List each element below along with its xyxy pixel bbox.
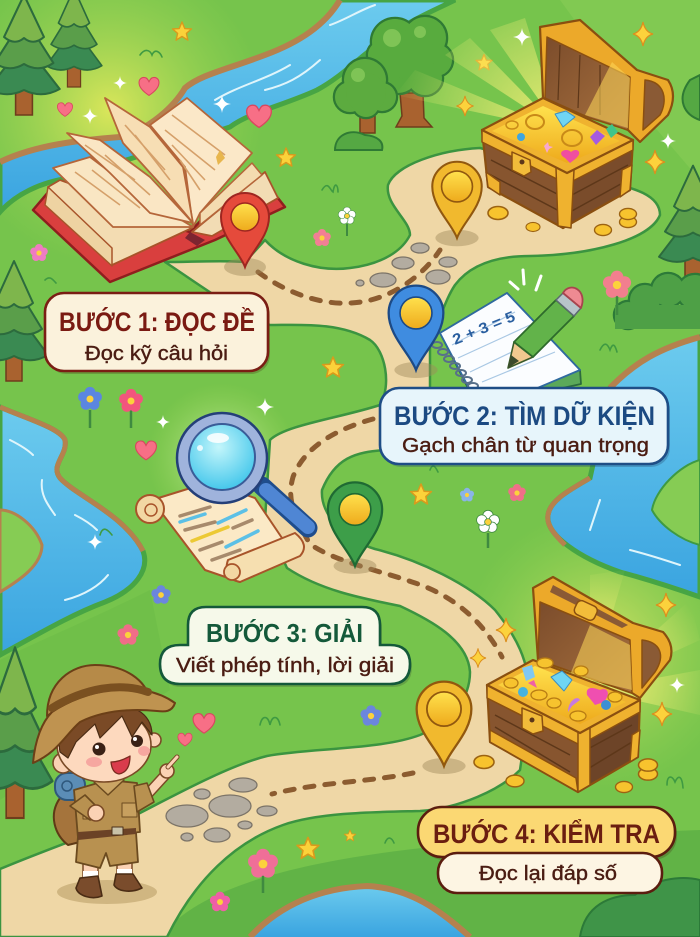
subtext: Gạch chân từ quan trọng — [402, 434, 649, 457]
sparkles — [82, 22, 685, 726]
chest 1 front — [482, 130, 567, 228]
book cover — [33, 188, 285, 282]
face — [53, 753, 73, 773]
label: step 4 — [418, 807, 677, 893]
grass tufts — [45, 50, 683, 843]
river: left — [0, 407, 145, 655]
legs — [83, 860, 98, 880]
scroll — [136, 482, 304, 582]
belt — [78, 828, 136, 840]
pin: green, step 3 — [328, 482, 382, 574]
chest 2 lock — [522, 708, 543, 734]
heading: BƯỚC 4: KIỂM TRA — [433, 818, 660, 849]
chest 2 lid — [533, 577, 671, 698]
notebook equation: 2 + 3 = 5 — [450, 308, 518, 349]
label: step 3 — [160, 607, 412, 687]
heading: BƯỚC 2: TÌM DỮ KIỆN — [394, 400, 655, 431]
chest 1 coins — [488, 206, 508, 220]
bushes — [580, 75, 700, 937]
book leaves — [53, 157, 193, 227]
chest 2 coins — [474, 756, 494, 768]
pin: gold, step 4 — [417, 682, 471, 774]
river: bottom — [250, 886, 470, 937]
shirt — [74, 780, 140, 838]
book — [33, 98, 285, 282]
scroll text lines — [180, 507, 258, 560]
round trees — [334, 16, 453, 150]
subtext: Đọc lại đáp số — [479, 863, 617, 885]
hearts — [57, 77, 271, 746]
treasure chest 2 — [474, 577, 671, 793]
bedroll — [55, 773, 85, 800]
pin: red, step 1 — [221, 193, 269, 276]
pin: gold, chest 1 — [432, 162, 482, 246]
island: right — [652, 460, 700, 545]
chest 1 lock — [512, 152, 531, 176]
hair — [59, 704, 152, 758]
chest 2 treasure — [487, 660, 640, 733]
chest 1 treasure — [482, 98, 633, 173]
treasure chest 1 — [482, 20, 673, 236]
flowers — [30, 207, 631, 911]
magnifying glass — [177, 413, 308, 528]
chest 2 front — [487, 685, 580, 792]
river: right — [548, 337, 700, 597]
heading: BƯỚC 1: ĐỌC ĐỀ — [59, 306, 255, 337]
subtext: Đọc kỹ câu hỏi — [85, 343, 228, 365]
boots — [76, 876, 102, 898]
shadow — [57, 880, 157, 904]
heading: BƯỚC 3: GIẢI — [206, 618, 363, 648]
notebook — [432, 293, 581, 395]
stars — [172, 22, 492, 858]
shorts — [76, 832, 138, 868]
book page block — [48, 180, 192, 265]
arms — [70, 795, 100, 820]
chest 2 glow rays — [590, 570, 700, 715]
explorer boy — [33, 665, 177, 904]
hat — [47, 665, 150, 716]
stepping stones — [166, 243, 457, 842]
notebook spiral — [432, 342, 478, 389]
label: step 1 — [45, 293, 270, 374]
subtext: Viết phép tính, lời giải — [176, 654, 394, 677]
pencil — [508, 270, 583, 368]
label: step 2 — [380, 388, 670, 467]
pin: blue, step 2 — [389, 286, 443, 378]
island: left — [0, 510, 42, 592]
dashed route — [258, 250, 502, 794]
chest 1 lid — [540, 20, 673, 142]
chest 1 glow rays — [395, 18, 560, 130]
backpack — [54, 788, 88, 845]
sand path — [0, 148, 660, 937]
river: top — [0, 0, 455, 212]
